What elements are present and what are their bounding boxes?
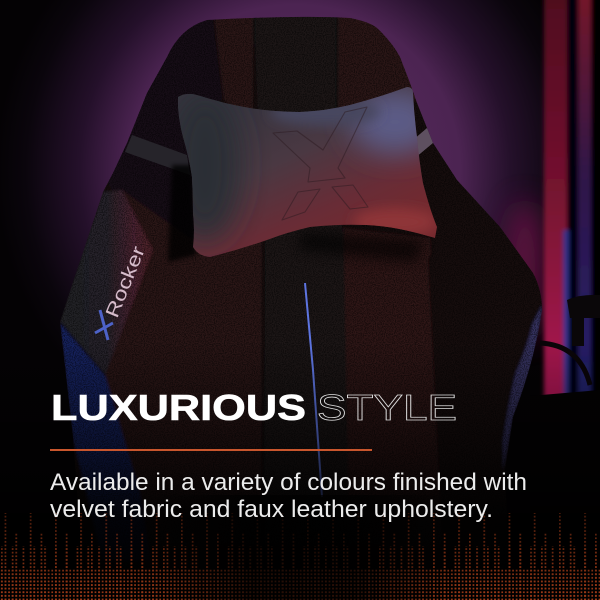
chair brand logo: X Rocker: Rocker [102,243,150,321]
pillow: top-centre blue sheen [270,98,380,126]
heading: LUXURIOUS STYLE: STYLE [317,387,457,428]
panel: right velvet top [336,18,416,108]
panel: top left velvet [214,14,254,120]
body text: velvet fabric and faux leather upholstery. [50,496,493,523]
body text: Available in a variety of colours finished with [50,469,527,496]
orange divider [50,449,372,451]
heading: LUXURIOUS STYLE [51,387,457,428]
icon: blue X [95,310,113,340]
velvet grain [60,17,542,503]
panel: centre stripe [253,17,346,360]
panel: right velvet lower [342,228,438,477]
chair brand logo: X Rocker [95,243,150,340]
body text [50,469,527,523]
pillow shadow [168,165,425,262]
pillow: grey left shading [169,90,241,240]
stool arm [540,343,590,385]
pillow straps [125,128,433,175]
chair backrest [60,16,542,526]
panel: left velvet [105,192,264,466]
headrest pillow [178,87,437,257]
pillow: blue highlight [351,90,439,154]
bottom dark gradient [0,340,600,600]
background: red light bars at right [530,0,600,600]
heading: LUXURIOUS STYLE: LUXURIOUS [51,387,306,428]
panel: right bolster [428,254,540,431]
dot equaliser pattern [0,495,600,600]
panel: left dark wing [108,20,224,222]
stool seat [567,295,600,318]
panel: leather logo band [60,190,153,375]
blue stitched light line [305,283,322,497]
panel: right grey-blue edge [503,305,542,470]
icon: embossed X logo [273,107,368,220]
panel: blue fabric [60,323,142,519]
pillow: red highlight [353,208,437,236]
